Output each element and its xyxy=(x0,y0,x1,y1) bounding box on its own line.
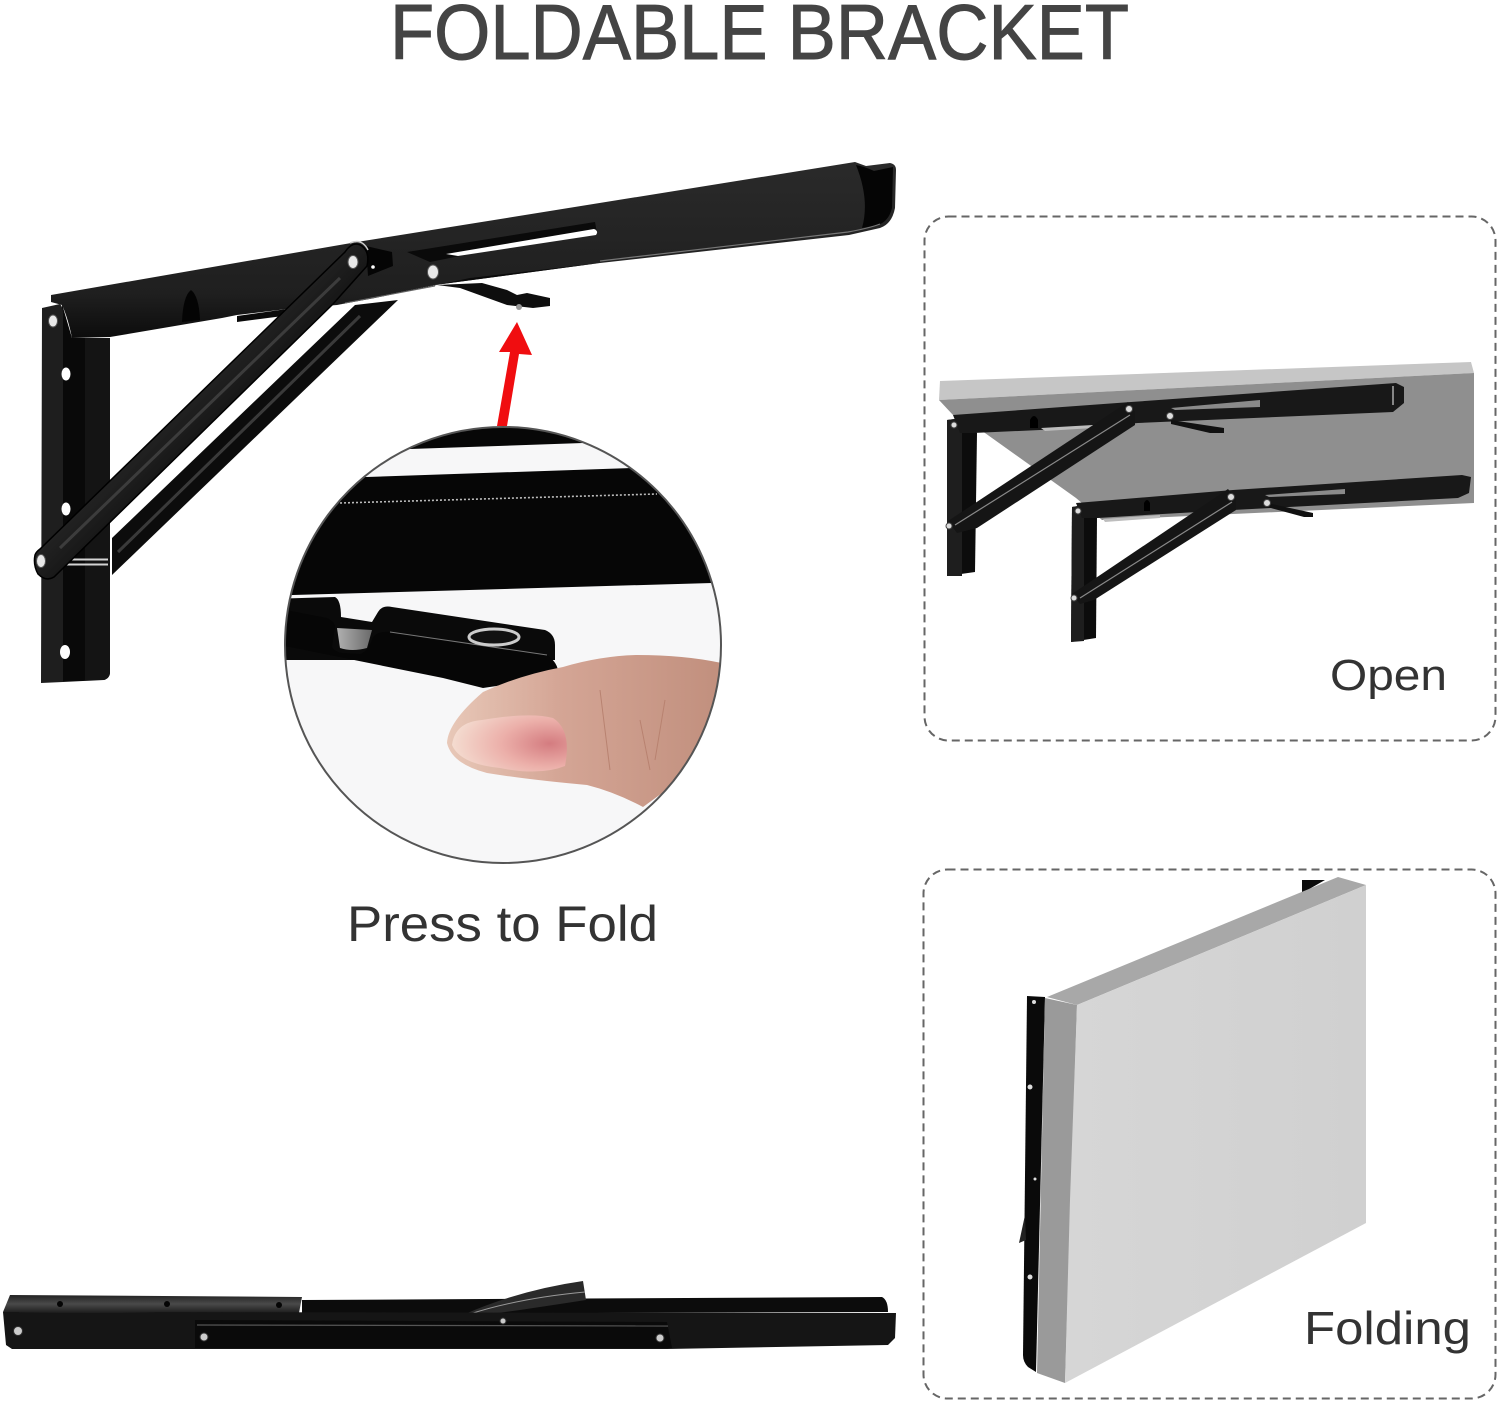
magnified arm xyxy=(292,468,711,596)
lower bar under arm xyxy=(337,263,600,305)
lever xyxy=(465,1281,586,1314)
board left edge xyxy=(1037,998,1077,1383)
panel: folding xyxy=(924,870,1496,1398)
release lever xyxy=(437,283,550,308)
brace outer xyxy=(34,244,368,579)
finger xyxy=(447,655,730,807)
zoom circle: press to fold xyxy=(284,426,722,864)
arm notch and tabs xyxy=(182,290,200,322)
bracket wall plate holes xyxy=(60,368,70,659)
rivets xyxy=(14,1318,664,1342)
fingernail xyxy=(452,715,567,772)
board face xyxy=(1065,885,1366,1383)
upper bracket xyxy=(946,383,1404,576)
magnified lever front xyxy=(354,660,558,688)
lever ring xyxy=(469,629,519,645)
bracket long arm xyxy=(51,162,896,338)
folded bracket, side view xyxy=(3,1281,896,1349)
label: open: Open xyxy=(1330,651,1447,700)
shelf underside xyxy=(939,373,1474,520)
bracket wall plate xyxy=(62,304,110,682)
rivets xyxy=(36,256,438,568)
magnified arm top edge xyxy=(410,428,582,449)
brace inner xyxy=(112,300,398,575)
wall plate xyxy=(3,1295,302,1313)
label: folding: Folding xyxy=(1304,1302,1471,1354)
main bracket, open xyxy=(34,162,896,683)
magnified lever back plate xyxy=(270,597,555,660)
back channel xyxy=(302,1297,888,1314)
red arrow xyxy=(497,322,532,426)
middle rail xyxy=(195,1320,672,1348)
spring clip xyxy=(65,560,108,564)
main body xyxy=(3,1312,896,1349)
arm slot xyxy=(407,222,597,262)
board top edge xyxy=(1047,877,1366,1005)
panel: open xyxy=(924,216,1496,740)
top bracket stub xyxy=(1302,880,1325,892)
lower bracket xyxy=(1071,475,1471,642)
label: press to fold: Press to Fold xyxy=(347,896,658,952)
shelf top edge xyxy=(939,362,1474,400)
folded bracket xyxy=(1023,996,1045,1372)
